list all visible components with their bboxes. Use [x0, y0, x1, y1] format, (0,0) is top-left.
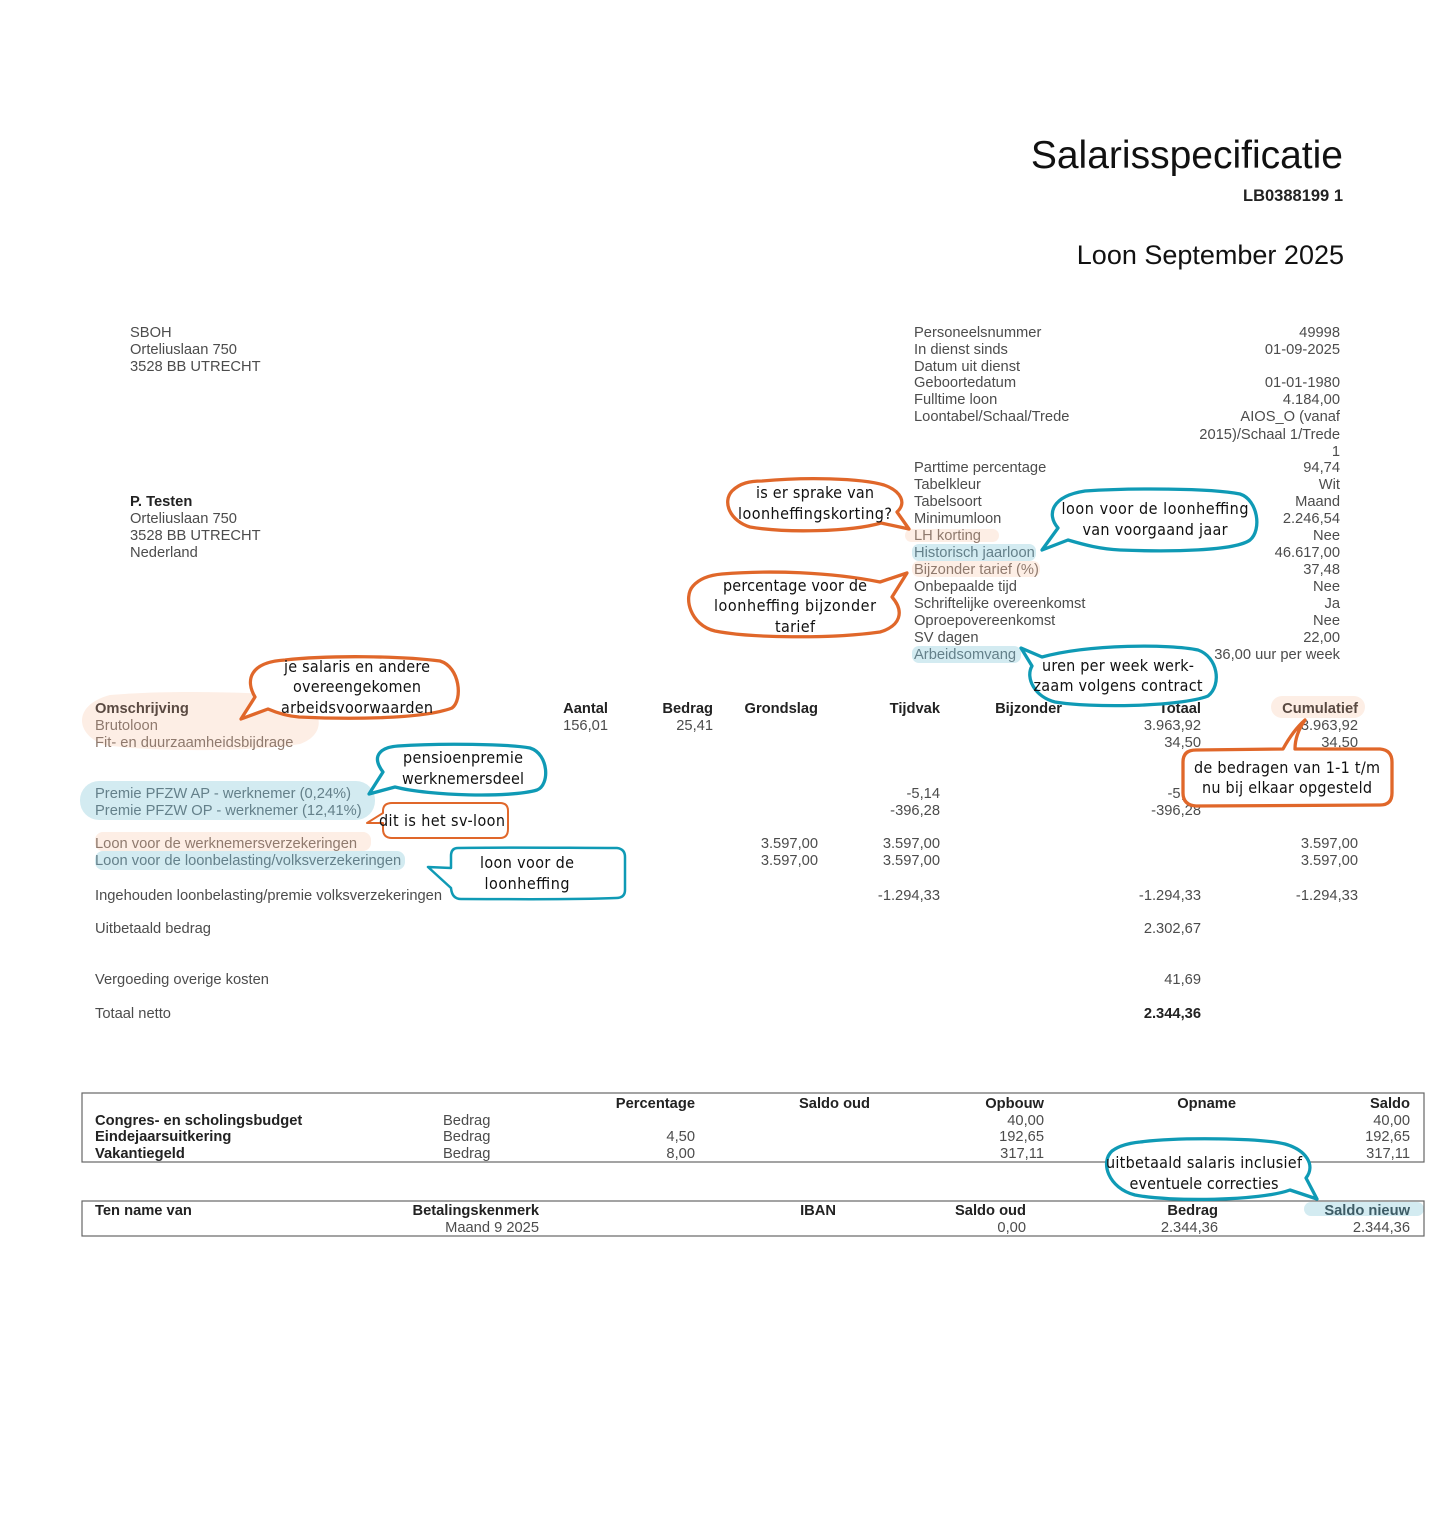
panel: payment table [82, 1201, 1424, 1236]
salary table descriptions: Loon voor de werknemersverzekeringen [95, 836, 357, 852]
callout: loon voor de loonheffing [428, 848, 625, 899]
salary table numbers: 34,50 [1321, 735, 1358, 751]
employer address: Orteliuslaan 750 [130, 342, 237, 358]
panel: budgets table: Bedrag [443, 1129, 490, 1145]
callout: bijzonder tarief: percentage voor de [723, 576, 867, 595]
panel: budgets table: Vakantiegeld [95, 1146, 185, 1162]
salary table descriptions: Loon voor de loonbelasting/volksverzekeringen [95, 853, 401, 869]
callout: loon voor de loonheffing: loonheffing [484, 874, 570, 893]
employee details labels: Parttime percentage [914, 460, 1046, 476]
panel: payment table: IBAN [800, 1203, 836, 1219]
callout: pensioenpremie [369, 744, 546, 795]
salary table numbers: 156,01 [563, 718, 608, 734]
employee details labels: Onbepaalde tijd [914, 579, 1017, 595]
panel: budgets table: 40,00 [1007, 1113, 1044, 1129]
salary table numbers: -396,28 [1151, 803, 1201, 819]
employee details labels: Loontabel/Schaal/Trede [914, 409, 1069, 425]
panel: payment table: Saldo nieuw [1324, 1203, 1411, 1219]
employee details values: Maand [1295, 494, 1340, 510]
employee details values: 2.246,54 [1283, 511, 1340, 527]
salary table numbers: -5,14 [907, 786, 940, 802]
salary table descriptions: Fit- en duurzaamheidsbijdrage [95, 735, 293, 751]
callout: bijzonder tarief: loonheffing bijzonder [714, 596, 876, 615]
panel: budgets table: 40,00 [1373, 1113, 1410, 1129]
panel: budgets table: 4,50 [666, 1129, 695, 1145]
highlight: cumulatief [1271, 696, 1365, 718]
employee details values: Nee [1313, 613, 1340, 629]
salary table numbers: 2.344,36 [1144, 1006, 1201, 1022]
salary table descriptions: Brutoloon [95, 718, 158, 734]
panel: budgets table: Percentage [616, 1096, 695, 1112]
panel: budgets table: Congres- en scholingsbudget [95, 1113, 302, 1129]
highlight: historisch jaarloon [912, 544, 1036, 561]
salary table headers: Cumulatief [1282, 701, 1358, 717]
callout: arbeidsvoorwaarden: je salaris en andere [283, 657, 430, 676]
employer address [130, 325, 261, 375]
employee address [130, 494, 261, 561]
salary table descriptions [95, 718, 442, 1022]
employee details values: 01-01-1980 [1265, 375, 1340, 391]
callout: arbeidsomvang: zaam volgens contract [1034, 676, 1203, 695]
salary table numbers [563, 718, 1358, 1022]
panel: budgets table: Opbouw [985, 1096, 1045, 1112]
employee details labels: SV dagen [914, 630, 979, 646]
employee details labels: Tabelkleur [914, 477, 981, 493]
salary table descriptions: Uitbetaald bedrag [95, 921, 211, 937]
salary table headers: Totaal [1159, 701, 1201, 717]
employee details values [1199, 325, 1341, 663]
salary table headers: Bijzonder [995, 701, 1062, 717]
salary table headers: Aantal [563, 701, 608, 717]
employee details labels: In dienst sinds [914, 342, 1008, 358]
callout: loonheffingskorting [728, 479, 909, 531]
callout: arbeidsvoorwaarden [241, 657, 458, 719]
callout: historisch jaarloon: van voorgaand jaar [1082, 520, 1228, 539]
employee details labels: Tabelsoort [914, 494, 982, 510]
salary table numbers: 34,50 [1164, 735, 1201, 751]
employee details labels: LH korting [914, 528, 981, 544]
callout: arbeidsvoorwaarden: overeengekomen [293, 677, 421, 696]
panel: budgets table: 192,65 [999, 1129, 1044, 1145]
panel: payment table: Maand 9 2025 [445, 1220, 539, 1236]
employee details values: Nee [1313, 579, 1340, 595]
employee details values: 2015)/Schaal 1/Trede [1199, 427, 1340, 443]
salary table descriptions: Premie PFZW AP - werknemer (0,24%) [95, 786, 351, 802]
callout: pensioenpremie: werknemersdeel [402, 769, 524, 788]
employee details values: 22,00 [1303, 630, 1340, 646]
salary table numbers: 3.963,92 [1301, 718, 1358, 734]
highlight: LH korting [905, 529, 999, 542]
period heading: Loon September 2025 [1077, 240, 1344, 270]
callout: pensioenpremie: pensioenpremie [403, 748, 523, 767]
panel: budgets table: 317,11 [1000, 1146, 1044, 1162]
salary table numbers: 3.597,00 [761, 836, 818, 852]
employee details values: 1 [1332, 444, 1340, 460]
highlight: premie PFZW [80, 781, 375, 820]
highlight: saldo nieuw [1304, 1202, 1424, 1216]
salary table numbers: 2.302,67 [1144, 921, 1201, 937]
employer address: SBOH [130, 325, 172, 341]
salary table numbers: 3.597,00 [883, 836, 940, 852]
salary table numbers: 3.597,00 [883, 853, 940, 869]
callout: cumulatieve bedragen: nu bij elkaar opgesteld [1202, 778, 1372, 797]
employee details values: AIOS_O (vanaf [1240, 409, 1341, 425]
salary table headers: Tijdvak [890, 701, 941, 717]
employee details values: 46.617,00 [1275, 545, 1340, 561]
panel: budgets table: Opname [1177, 1096, 1236, 1112]
employee details labels: Fulltime loon [914, 392, 997, 408]
salary table numbers: 41,69 [1164, 972, 1201, 988]
callout: bijzonder tarief: tarief [775, 617, 816, 636]
employee details labels: Minimumloon [914, 511, 1001, 527]
employee address: Orteliuslaan 750 [130, 511, 237, 527]
callout: cumulatieve bedragen [1183, 720, 1392, 806]
callout: historisch jaarloon: loon voor de loonheffing [1062, 499, 1248, 518]
highlight: loon werknemersverzekeringen [95, 832, 371, 851]
employer address: 3528 BB UTRECHT [130, 359, 261, 375]
employee details labels: Geboortedatum [914, 375, 1016, 391]
employee details labels: Datum uit dienst [914, 359, 1020, 375]
salary table numbers: -1.294,33 [878, 888, 940, 904]
salary table headers [95, 701, 1358, 717]
employee details values: 49998 [1299, 325, 1340, 341]
panel: budgets table: Bedrag [443, 1146, 490, 1162]
salary table numbers: -5,14 [1168, 786, 1201, 802]
panel: budgets table: Eindejaarsuitkering [95, 1129, 231, 1145]
panel: payment table: Ten name van [95, 1203, 192, 1219]
employee details labels: Bijzonder tarief (%) [914, 562, 1039, 578]
employee details labels: Arbeidsomvang [914, 647, 1016, 663]
highlight: arbeidsomvang [912, 646, 1021, 663]
salary table numbers: -1.294,33 [1139, 888, 1201, 904]
callout: loonheffingskorting: loonheffingskorting? [738, 504, 892, 523]
callout: arbeidsomvang [1021, 646, 1216, 706]
panel: payment table: 2.344,36 [1161, 1220, 1218, 1236]
callout: sv-loon: dit is het sv-loon [379, 811, 505, 830]
panel: payment table: Saldo oud [955, 1203, 1026, 1219]
employee details labels: Personeelsnummer [914, 325, 1041, 341]
panel: budgets table: Saldo [1370, 1096, 1410, 1112]
panel: payment table: 2.344,36 [1353, 1220, 1410, 1236]
employee address: 3528 BB UTRECHT [130, 528, 261, 544]
callout: arbeidsomvang: uren per week werk- [1042, 656, 1194, 675]
salary table numbers: 3.597,00 [1301, 836, 1358, 852]
salary table numbers: 3.963,92 [1144, 718, 1201, 734]
salary table headers: Omschrijving [95, 701, 189, 717]
employee details labels: Historisch jaarloon [914, 545, 1035, 561]
callout: loon voor de loonheffing: loon voor de [480, 853, 574, 872]
callout: bijzonder tarief [689, 572, 907, 637]
salary table numbers: 25,41 [676, 718, 713, 734]
employee address: P. Testen [130, 494, 192, 510]
panel: payment table: Betalingskenmerk [412, 1203, 540, 1219]
callout: loonheffingskorting: is er sprake van [756, 483, 874, 502]
callout: uitbetaald salaris [1106, 1139, 1317, 1199]
employee address: Nederland [130, 545, 198, 561]
callout: uitbetaald salaris: eventuele correcties [1130, 1174, 1278, 1193]
highlight: loon loonbelasting [95, 851, 405, 870]
callout: uitbetaald salaris: uitbetaald salaris inclusief [1106, 1153, 1303, 1172]
employee details labels [914, 325, 1085, 663]
panel: budgets table: 8,00 [666, 1146, 695, 1162]
callout: arbeidsvoorwaarden: arbeidsvoorwaarden [281, 698, 433, 717]
panel: budgets table: Saldo oud [799, 1096, 870, 1112]
employee details values: 01-09-2025 [1265, 342, 1340, 358]
highlight: salary elements [82, 692, 319, 750]
panel: budgets table [82, 1093, 1424, 1162]
highlight: bijzonder tarief [912, 561, 1040, 577]
salary table numbers: 3.597,00 [1301, 853, 1358, 869]
callout: sv-loon [367, 803, 508, 838]
callout: historisch jaarloon [1042, 489, 1257, 551]
employee details values: 4.184,00 [1283, 392, 1340, 408]
employee details labels: Oproepovereenkomst [914, 613, 1055, 629]
salary table numbers: 3.597,00 [761, 853, 818, 869]
panel: budgets table: 192,65 [1365, 1129, 1410, 1145]
salary table descriptions: Totaal netto [95, 1006, 171, 1022]
salary table descriptions: Premie PFZW OP - werknemer (12,41%) [95, 803, 362, 819]
employee details values: Nee [1313, 528, 1340, 544]
panel: budgets table: Bedrag [443, 1113, 490, 1129]
document number: LB0388199 1 [1243, 187, 1343, 205]
employee details values: Wit [1319, 477, 1340, 493]
employee details values: 36,00 uur per week [1214, 647, 1341, 663]
employee details labels: Schriftelijke overeenkomst [914, 596, 1085, 612]
employee details values: 94,74 [1303, 460, 1340, 476]
salary table numbers: -1.294,33 [1296, 888, 1358, 904]
salary table descriptions: Vergoeding overige kosten [95, 972, 269, 988]
panel: payment table: Bedrag [1167, 1203, 1218, 1219]
callout: cumulatieve bedragen: de bedragen van 1-1 t/m [1194, 758, 1380, 777]
panel: budgets table: 317,11 [1366, 1146, 1410, 1162]
employee details values: 37,48 [1303, 562, 1340, 578]
salary table descriptions: Ingehouden loonbelasting/premie volksverzekeringen [95, 888, 442, 904]
panel: payment table: 0,00 [997, 1220, 1026, 1236]
salary table headers: Grondslag [745, 701, 818, 717]
title: Salarisspecificatie [1031, 134, 1343, 177]
salary table headers: Bedrag [662, 701, 713, 717]
salary table numbers: -396,28 [890, 803, 940, 819]
employee details values: Ja [1324, 596, 1341, 612]
